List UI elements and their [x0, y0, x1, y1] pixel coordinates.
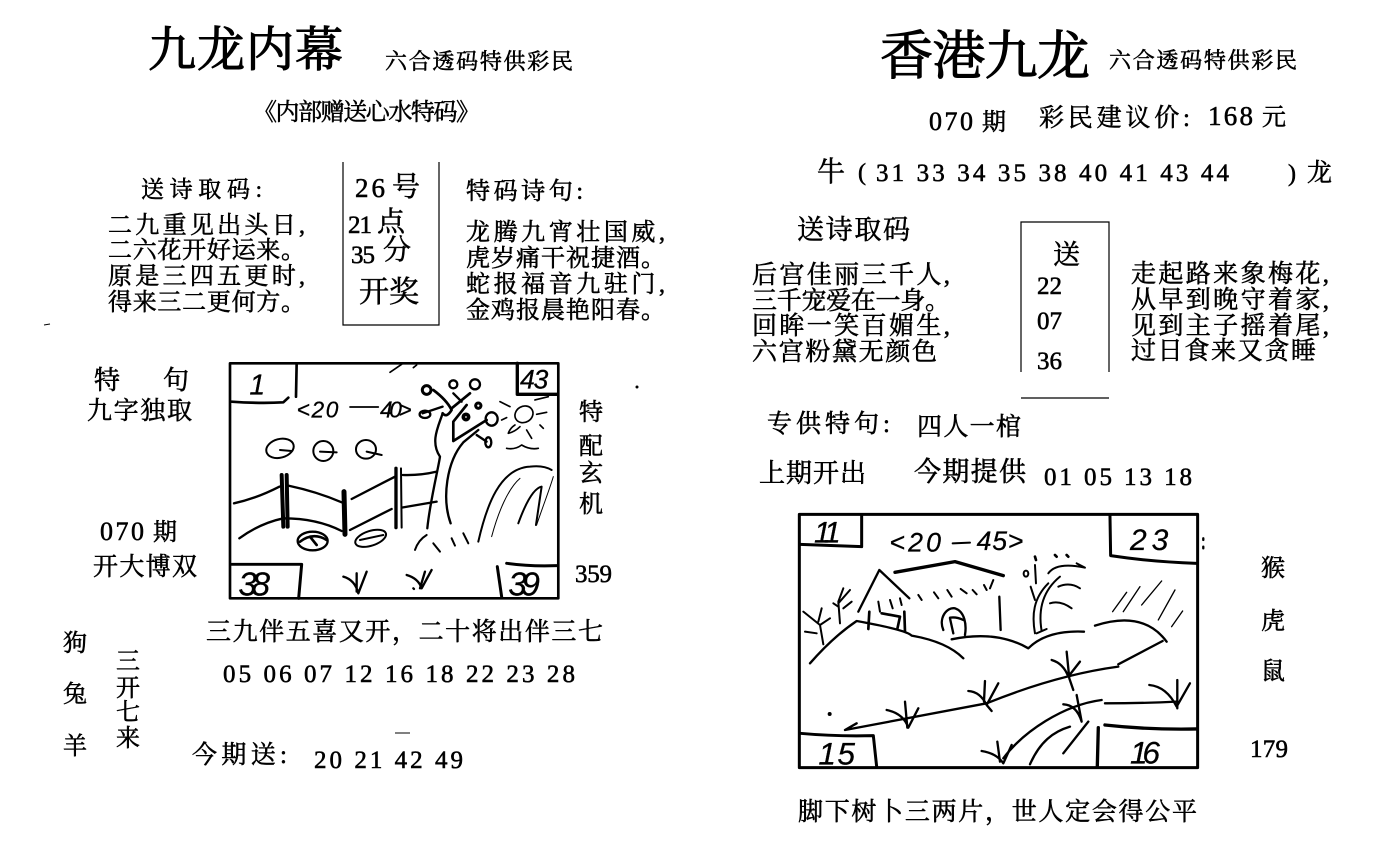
side number: 359: 359 [575, 561, 612, 588]
poem block: special code: 龙腾九宵壮国威, [466, 219, 665, 246]
grass mound [415, 466, 553, 552]
trees [803, 555, 1085, 644]
side number: 179: 179 [1250, 736, 1288, 763]
hint column [116, 649, 140, 752]
panel: 香港九龙 right sheet [752, 28, 1332, 826]
poem block: dog: 过日食来又贪睡 [1131, 337, 1316, 365]
zodiac number row: 牛 [817, 156, 845, 188]
zodiac number row: 31 33 34 35 38 40 41 43 44 [876, 160, 1230, 187]
verse under sketch: left: 三九伴五喜又开，二十将出伴三七 [206, 618, 603, 646]
side label: 特配玄机: 机 [579, 491, 603, 518]
poem block: left: 二六花开好运来。 [108, 237, 305, 264]
corner number: 23: 23 [1129, 524, 1169, 557]
range label end: 45> [977, 526, 1023, 556]
corner number: 39: 39 [508, 567, 540, 604]
draw time box: 21 [348, 212, 372, 239]
poem block: left: 原是三四五更时, [108, 263, 305, 290]
previous and current [759, 457, 1192, 491]
side zodiac column: 鼠 [1261, 658, 1285, 685]
corner number: 1: 1 [249, 369, 265, 401]
draw time box: 点 [377, 206, 406, 238]
number row: left: 05 06 07 12 16 18 22 23 28 [223, 661, 575, 688]
draw time box [343, 162, 439, 325]
side zodiac column: 猴 [1261, 555, 1285, 582]
special phrase: 专供特句: [767, 410, 890, 438]
price: 168 [1208, 101, 1253, 131]
poem block: special code: 金鸡报晨艳阳春。 [466, 297, 665, 324]
gift label: 今期送: [192, 741, 287, 769]
special phrase label: 句 [163, 366, 189, 395]
verse under sketch: right: 脚下树卜三两片，世人定会得公平 [798, 798, 1197, 826]
issue number: 期 [982, 109, 1006, 136]
range label: <20 [297, 396, 339, 422]
hint column: 七 [116, 699, 140, 726]
zodiac number row: ) [1288, 161, 1296, 187]
zodiac column: 兔 [63, 681, 87, 708]
zodiac column [63, 630, 87, 760]
special phrase label [87, 366, 192, 425]
special phrase [767, 410, 1021, 441]
issue label: left: 期 [153, 519, 177, 546]
tree [420, 379, 498, 528]
side label: 特配玄机: 特 [579, 399, 603, 426]
special phrase: 四人一棺 [917, 413, 1021, 441]
price: 彩民建议价: [1039, 104, 1190, 132]
special phrase label: 特 [94, 366, 120, 395]
draw time box: 35 [351, 242, 375, 269]
poem block: special code: 蛇报福音九驻门, [466, 271, 665, 298]
poem block: left [108, 212, 305, 316]
subheading: special code: 《内部赠送心水特码》 [253, 99, 480, 126]
poem block: right: 六宫粉黛无颜色 [752, 338, 937, 366]
house [858, 562, 1003, 635]
title: 九龙内幕: 九龙内幕 [148, 24, 343, 77]
previous and current: 今期提供 [914, 457, 1027, 487]
poem block: right [752, 261, 950, 366]
gift numbers: 20 21 42 49 [314, 747, 463, 774]
gift code box: 36 [1037, 348, 1062, 375]
issue label: left: 开大博双 [93, 553, 197, 581]
issue number [929, 107, 1006, 136]
price: 元 [1262, 105, 1286, 131]
draw time box: 分 [383, 234, 411, 266]
corner number: 38: 38 [238, 567, 270, 604]
corner number: 11: 11 [814, 516, 841, 549]
zodiac column: 狗 [63, 630, 87, 657]
poem block: dog: 见到主子摇着尾, [1131, 312, 1329, 340]
draw time box: 26 [355, 173, 385, 203]
hills [810, 581, 1183, 663]
side label: 特配玄机 [579, 399, 603, 518]
sketch: fence and tree [230, 363, 558, 604]
coins [264, 436, 388, 550]
poem block: right: 后宫佳丽三千人, [752, 261, 950, 289]
poem block: special code: 虎岁痛干祝捷酒。 [466, 245, 665, 272]
fence [234, 468, 437, 538]
corner number: 43: 43 [520, 364, 548, 394]
poem block: left: 二九重见出头日, [108, 212, 305, 239]
draw time box: 开奖 [359, 276, 419, 309]
sun and cloud marks [500, 397, 548, 449]
special phrase label: 九字独取 [87, 397, 192, 425]
poem heading: left: 送诗取码: [141, 177, 262, 202]
poem heading: right: 送诗取码 [797, 215, 910, 245]
poem block: dog: 走起路来象梅花, [1131, 260, 1329, 288]
grass sprouts [829, 652, 1190, 763]
grass sprouts [343, 570, 432, 593]
gift code box: 送 [1053, 240, 1080, 270]
issue number: 070 [929, 107, 973, 136]
side label: 特配玄机: 配 [579, 433, 603, 460]
path and arrows [845, 641, 1177, 764]
poem block: dog: 从早到晚守着家, [1131, 286, 1329, 314]
draw time box: 号 [392, 172, 420, 203]
corner number: 15: 15 [818, 735, 855, 771]
price [1039, 101, 1286, 132]
previous and current: 上期开出 [759, 459, 866, 488]
poem block: special code [466, 219, 665, 324]
poem block: left: 得来三二更何方。 [108, 289, 305, 316]
zodiac column: 羊 [63, 733, 87, 760]
poem block: dog [1131, 260, 1329, 365]
side zodiac column: 虎 [1261, 608, 1285, 635]
sketch: house and hills [799, 514, 1203, 771]
poem block: right: 回眸一笑百媚生, [752, 312, 950, 340]
subtitle: left: 六合透码特供彩民 [385, 49, 573, 74]
range label: <20 [889, 528, 941, 558]
issue label: left: 070 [100, 517, 144, 546]
subtitle: right: 六合透码特供彩民 [1109, 48, 1297, 73]
zodiac number row: ( [858, 160, 866, 186]
side zodiac column [1261, 555, 1285, 685]
poem heading: special code: 特码诗句: [466, 178, 583, 205]
range label end: 40> [380, 396, 412, 422]
corner number: 16: 16 [1130, 735, 1160, 771]
zodiac number row: 龙 [1307, 159, 1332, 187]
hint column: 来 [116, 725, 140, 752]
gift code box: 22 [1037, 273, 1062, 300]
issue label: left [93, 517, 197, 581]
title: 香港九龙: 香港九龙 [880, 28, 1090, 86]
side label: 特配玄机: 玄 [579, 460, 603, 487]
hint column: 开 [116, 676, 140, 702]
gift code box: 07 [1037, 308, 1062, 335]
zodiac number row [817, 156, 1332, 188]
panel: 九龙内幕 left sheet [63, 24, 665, 774]
hint column: 三 [116, 649, 140, 675]
poem block: right: 三千宠爱在一身。 [752, 287, 950, 315]
gift code box [1021, 222, 1109, 398]
previous and current: 01 05 13 18 [1044, 464, 1192, 491]
